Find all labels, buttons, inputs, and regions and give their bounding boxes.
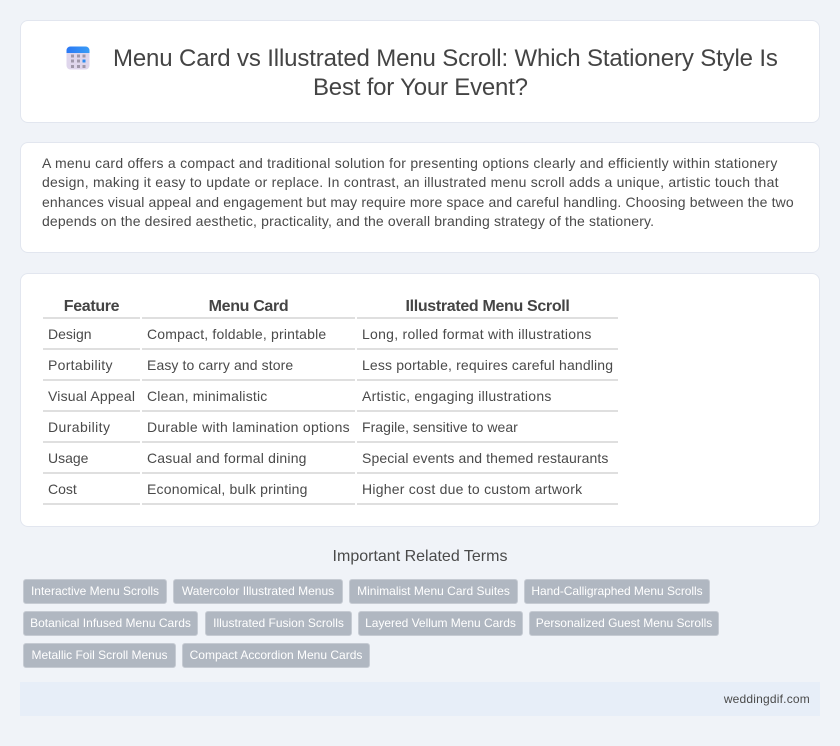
title: Menu Card vs Illustrated Menu Scroll: Which Stationery Style Is xyxy=(113,45,778,72)
intro text: enhances visual appeal and engagement but may require more space and careful handling. Choosing between the two xyxy=(42,194,794,210)
intro text: A menu card offers a compact and traditional solution for presenting options clearly and efficiently within stationery xyxy=(42,155,778,171)
related terms tags: Layered Vellum Menu Cards xyxy=(365,616,516,630)
intro text: design, making it easy to update or replace. In contrast, an illustrated menu scroll adds a unique, artistic touch that xyxy=(42,174,779,190)
row: cost: Higher cost due to custom artwork xyxy=(362,481,582,497)
intro panel xyxy=(20,142,820,253)
row: durability: Fragile, sensitive to wear xyxy=(362,419,518,435)
row: usage xyxy=(48,450,609,466)
related terms tags: Hand-Calligraphed Menu Scrolls xyxy=(531,584,703,598)
row: design: Design xyxy=(48,326,92,342)
row: durability: Durability xyxy=(48,419,110,435)
comparison table xyxy=(43,298,618,505)
table header: Illustrated Menu Scroll xyxy=(406,298,570,315)
related terms tags xyxy=(23,579,719,668)
related terms heading: Important Related Terms xyxy=(333,548,507,565)
related terms tags: Compact Accordion Menu Cards xyxy=(190,648,362,662)
related terms tags: Botanical Infused Menu Cards xyxy=(30,616,191,630)
row: visual appeal: Visual Appeal xyxy=(48,388,135,404)
row: cost: Economical, bulk printing xyxy=(147,481,308,497)
row: visual appeal: Clean, minimalistic xyxy=(147,388,268,404)
intro text: depends on the desired aesthetic, practicality, and the overall branding strategy of the stationery. xyxy=(42,213,654,229)
row: usage: Usage xyxy=(48,450,88,466)
row: portability: Less portable, requires careful handling xyxy=(362,357,613,373)
table header: Feature xyxy=(64,298,119,315)
title: Best for Your Event? xyxy=(313,74,528,101)
related terms tags: Illustrated Fusion Scrolls xyxy=(213,616,344,630)
row: cost xyxy=(48,481,582,497)
row: design xyxy=(48,326,592,342)
title xyxy=(113,45,778,101)
table header: Menu Card xyxy=(209,298,288,315)
row: portability: Portability xyxy=(48,357,113,373)
intro text xyxy=(42,155,794,229)
row: portability: Easy to carry and store xyxy=(147,357,293,373)
comparison table panel xyxy=(20,273,820,527)
related terms tags: Minimalist Menu Card Suites xyxy=(357,584,510,598)
icon: calendar xyxy=(66,46,90,70)
row: portability xyxy=(48,357,613,373)
row: visual appeal xyxy=(48,388,552,404)
row: usage: Special events and themed restaurants xyxy=(362,450,609,466)
row: durability xyxy=(48,419,518,435)
row: durability: Durable with lamination options xyxy=(147,419,350,435)
header panel xyxy=(20,20,820,123)
related terms tags: Interactive Menu Scrolls xyxy=(31,584,159,598)
row: cost: Cost xyxy=(48,481,77,497)
row: design: Long, rolled format with illustrations xyxy=(362,326,592,342)
table header xyxy=(64,298,570,315)
row: design: Compact, foldable, printable xyxy=(147,326,326,342)
row: visual appeal: Artistic, engaging illustrations xyxy=(362,388,552,404)
row: usage: Casual and formal dining xyxy=(147,450,307,466)
related terms tags: Personalized Guest Menu Scrolls xyxy=(536,616,712,630)
footer source text: weddingdif.com xyxy=(724,692,810,706)
footer bar xyxy=(20,682,820,716)
related terms tags: Metallic Foil Scroll Menus xyxy=(31,648,168,662)
related terms tags: Watercolor Illustrated Menus xyxy=(182,584,334,598)
